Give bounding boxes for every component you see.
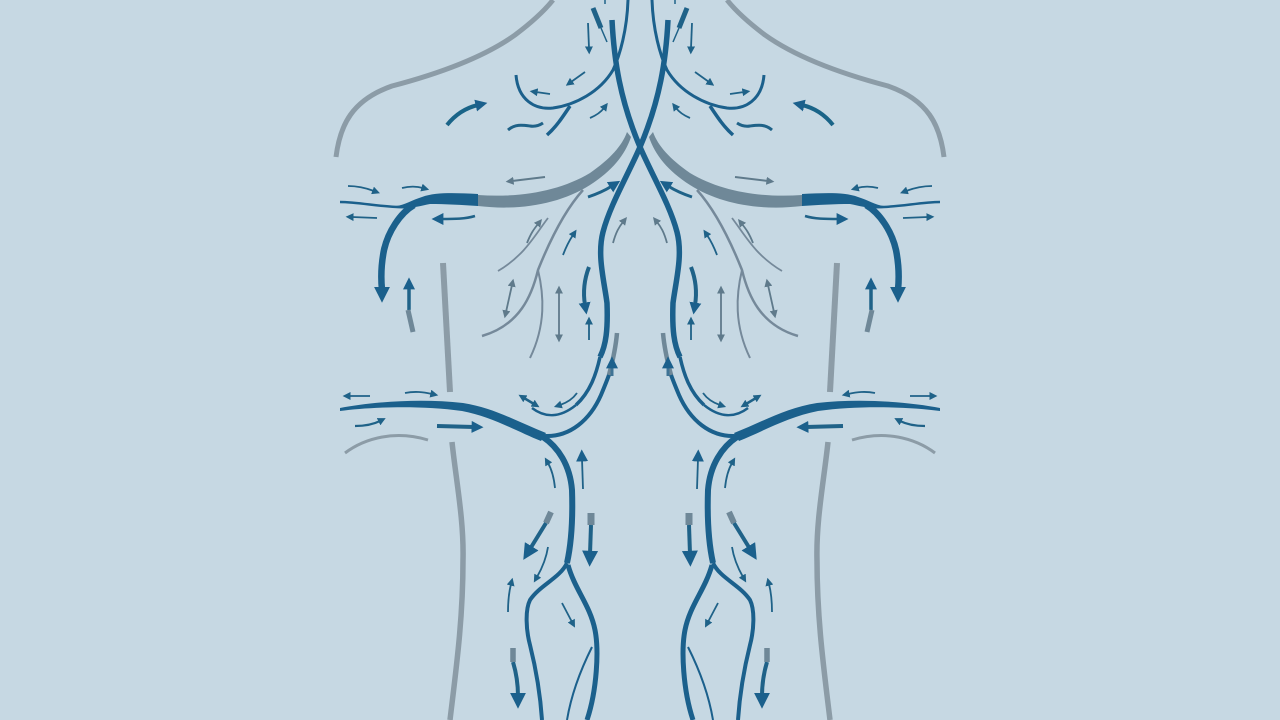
blue arm vessel — [802, 193, 940, 290]
flow arrows — [348, 105, 623, 696]
lower trunk vessel — [670, 372, 940, 720]
left half of body — [336, 0, 668, 720]
blue arm vessel — [340, 193, 478, 290]
gray branches — [697, 190, 798, 358]
flow arrows — [657, 105, 932, 696]
top neck vessel — [516, 0, 628, 135]
neck arrows — [508, 0, 607, 130]
central crossing vessel — [612, 20, 748, 415]
lower trunk vessel — [340, 372, 610, 720]
body outline — [336, 0, 553, 720]
gray branches — [482, 190, 583, 358]
gray shoulder vessel — [649, 132, 802, 208]
gray shoulder vessel — [478, 132, 631, 208]
neck arrows — [673, 0, 772, 130]
right half of body — [612, 0, 944, 720]
gray upper branch — [609, 333, 617, 375]
central crossing vessel — [532, 20, 668, 415]
body outline — [727, 0, 944, 720]
gray upper branch — [663, 333, 671, 375]
top neck vessel — [652, 0, 764, 135]
